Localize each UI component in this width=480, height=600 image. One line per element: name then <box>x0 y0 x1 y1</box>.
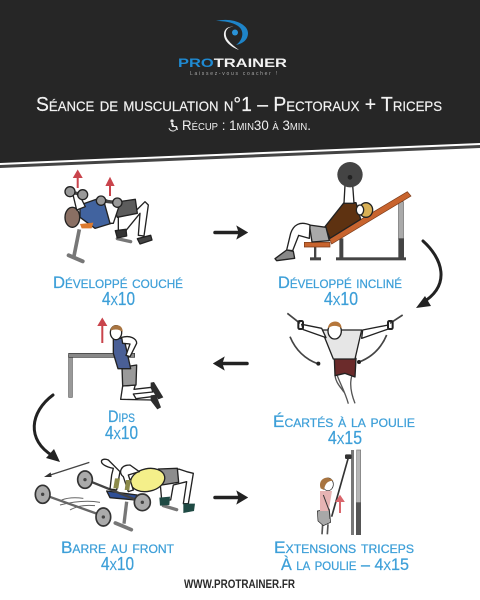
logo wordmark: PRO TRAINER <box>178 56 287 70</box>
arrow: curved to skull crusher <box>34 395 60 462</box>
arrow: curved to cable fly <box>416 241 441 308</box>
exercise 2: développé incliné <box>275 162 411 309</box>
header panel <box>0 0 480 168</box>
label: Extensions triceps <box>274 538 414 557</box>
recovery text: Récup : 1min30 à 3min. <box>182 117 311 133</box>
icon: red up arrow <box>337 496 343 513</box>
label: Développé couché <box>53 273 183 292</box>
logo <box>178 20 287 77</box>
arrow: left <box>220 362 247 365</box>
exercise 4: dips <box>69 320 163 443</box>
label: Développé incliné <box>278 273 402 292</box>
illustration: incline bench press <box>275 162 411 261</box>
sets: À la poulie – 4x15 <box>281 555 409 574</box>
sets: 4x10 <box>324 289 358 309</box>
icon: red up arrow <box>107 179 113 196</box>
icon: logo swoosh <box>216 20 248 50</box>
icon: red up arrow <box>74 172 81 188</box>
title: Séance de musculation n°1 – Pectoraux + Triceps <box>36 93 442 116</box>
exercise 1: développé couché <box>53 172 183 309</box>
exercise 6: extensions triceps <box>274 450 414 574</box>
sets: 4x10 <box>105 423 138 443</box>
arrow: right <box>215 496 241 499</box>
label: Écartés à la poulie <box>273 412 415 431</box>
exercise 5: barre au front <box>35 459 195 574</box>
illustration: cable triceps extension <box>317 450 361 535</box>
sets: 4x10 <box>101 554 134 574</box>
exercise 3: écartés à la poulie <box>273 313 415 448</box>
illustration: cable fly <box>287 313 403 404</box>
illustration: skull crusher <box>35 459 195 530</box>
icon: red up arrow <box>99 320 106 343</box>
logo tagline: Laissez-vous coacher ! <box>190 71 277 77</box>
label: Dips <box>108 407 135 426</box>
sets: 4x15 <box>328 428 362 448</box>
label: Barre au front <box>61 538 175 557</box>
illustration: dips <box>69 325 163 409</box>
arrow: right <box>215 231 241 234</box>
illustration: flat bench dumbbell press <box>65 187 152 261</box>
footer website: WWW.PROTRAINER.FR <box>184 577 295 591</box>
icon: rest figure <box>169 119 178 131</box>
sets: 4x10 <box>102 289 135 309</box>
